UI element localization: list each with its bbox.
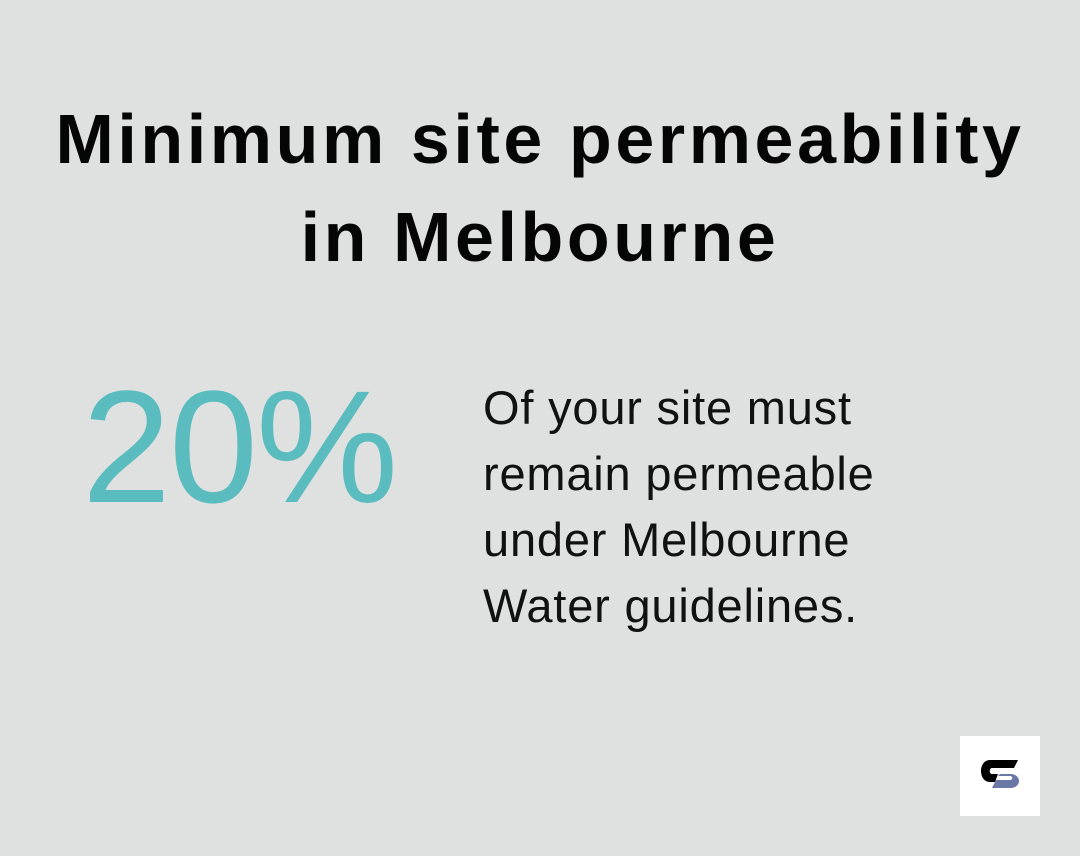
stat: 20%: 20% xyxy=(82,357,396,536)
title xyxy=(55,100,1025,276)
text block: description: Of your site must xyxy=(483,381,852,434)
icon: logo xyxy=(960,736,1040,816)
text block: description: remain permeable xyxy=(483,447,875,500)
text block: description xyxy=(483,381,875,632)
text block: description: under Melbourne xyxy=(483,513,850,566)
title: Minimum site permeability xyxy=(55,100,1025,178)
text block: description: Water guidelines. xyxy=(483,579,858,632)
title: in Melbourne xyxy=(301,198,779,276)
